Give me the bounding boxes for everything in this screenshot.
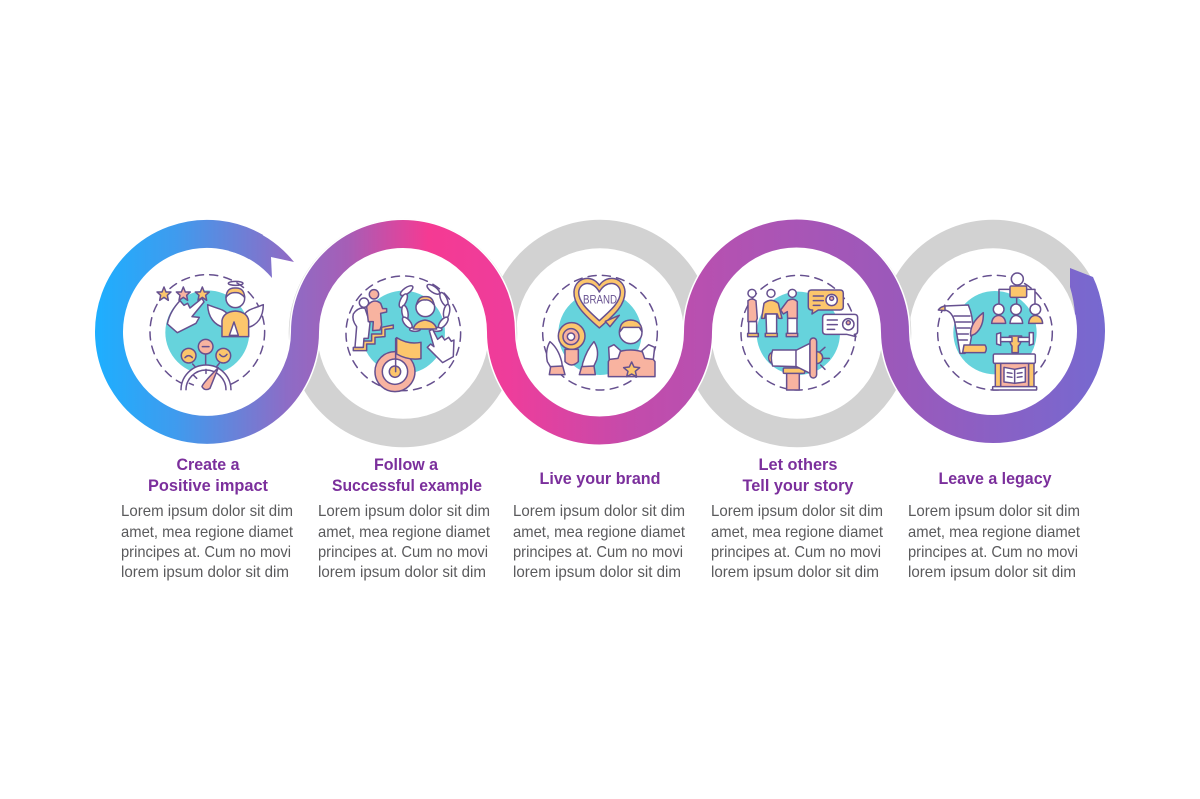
heading: create a positive impact xyxy=(148,456,268,495)
text block: column 3: principes at. Cum no movi xyxy=(513,544,683,561)
flowing gradient ribbon xyxy=(109,224,1103,430)
panel: step 1 create a positive impact xyxy=(150,275,265,395)
icon: people, speech bubbles and megaphone xyxy=(741,275,858,390)
heading: leave a legacy: Leave a legacy xyxy=(938,470,1052,488)
text block: column 5 xyxy=(908,503,1081,581)
text block: column 1: Lorem ipsum dolor sit dim xyxy=(121,503,293,520)
text block: column 2 xyxy=(318,503,491,581)
panel: step 2 follow a successful example xyxy=(346,276,461,392)
text block: column 3: amet, mea regione diamet xyxy=(513,524,686,541)
text block: column 1 xyxy=(121,503,294,581)
icon: org chart, scroll and podium xyxy=(938,273,1052,390)
heading: let others tell your story: Let others xyxy=(758,456,838,474)
heading: follow a successful example xyxy=(332,456,482,495)
panel: step 5 leave a legacy xyxy=(938,273,1052,390)
text block: column 3 xyxy=(513,503,686,581)
text block: column 5: lorem ipsum dolor sit dim xyxy=(908,564,1076,581)
text block: column 4 xyxy=(711,503,884,581)
heading: follow a successful example: Successful example xyxy=(332,477,482,495)
panel: step 4 let others tell your story xyxy=(741,275,858,390)
text block: column 1: lorem ipsum dolor sit dim xyxy=(121,564,289,581)
text block: column 4: principes at. Cum no movi xyxy=(711,544,881,561)
heading: let others tell your story: Tell your story xyxy=(742,477,854,495)
panel: step 3 live your brand xyxy=(543,275,657,390)
heading: let others tell your story xyxy=(742,456,854,495)
text block: column 3: Lorem ipsum dolor sit dim xyxy=(513,503,685,520)
text block: column 4: Lorem ipsum dolor sit dim xyxy=(711,503,883,520)
icon: brand heart, bulb and star person: BRAND xyxy=(583,293,617,307)
text block: column 4: lorem ipsum dolor sit dim xyxy=(711,564,879,581)
gray background rings xyxy=(303,233,1091,433)
text block: column 2: amet, mea regione diamet xyxy=(318,524,491,541)
text block: column 5: Lorem ipsum dolor sit dim xyxy=(908,503,1080,520)
text block: column 5: amet, mea regione diamet xyxy=(908,524,1081,541)
text block: column 2: Lorem ipsum dolor sit dim xyxy=(318,503,490,520)
text block: column 1: principes at. Cum no movi xyxy=(121,544,291,561)
text block: column 3: lorem ipsum dolor sit dim xyxy=(513,564,681,581)
text block: column 2: principes at. Cum no movi xyxy=(318,544,488,561)
text block: column 1: amet, mea regione diamet xyxy=(121,524,294,541)
icon: climbers, laurel, target and flag xyxy=(346,276,461,392)
heading: follow a successful example: Follow a xyxy=(374,456,439,474)
heading: live your brand: Live your brand xyxy=(540,470,660,488)
text block: column 5: principes at. Cum no movi xyxy=(908,544,1078,561)
text block: column 4: amet, mea regione diamet xyxy=(711,524,884,541)
text block: column 2: lorem ipsum dolor sit dim xyxy=(318,564,486,581)
heading: create a positive impact: Create a xyxy=(176,456,240,474)
icon: angel, stars and gauge xyxy=(150,275,265,395)
heading: create a positive impact: Positive impact xyxy=(148,477,268,495)
